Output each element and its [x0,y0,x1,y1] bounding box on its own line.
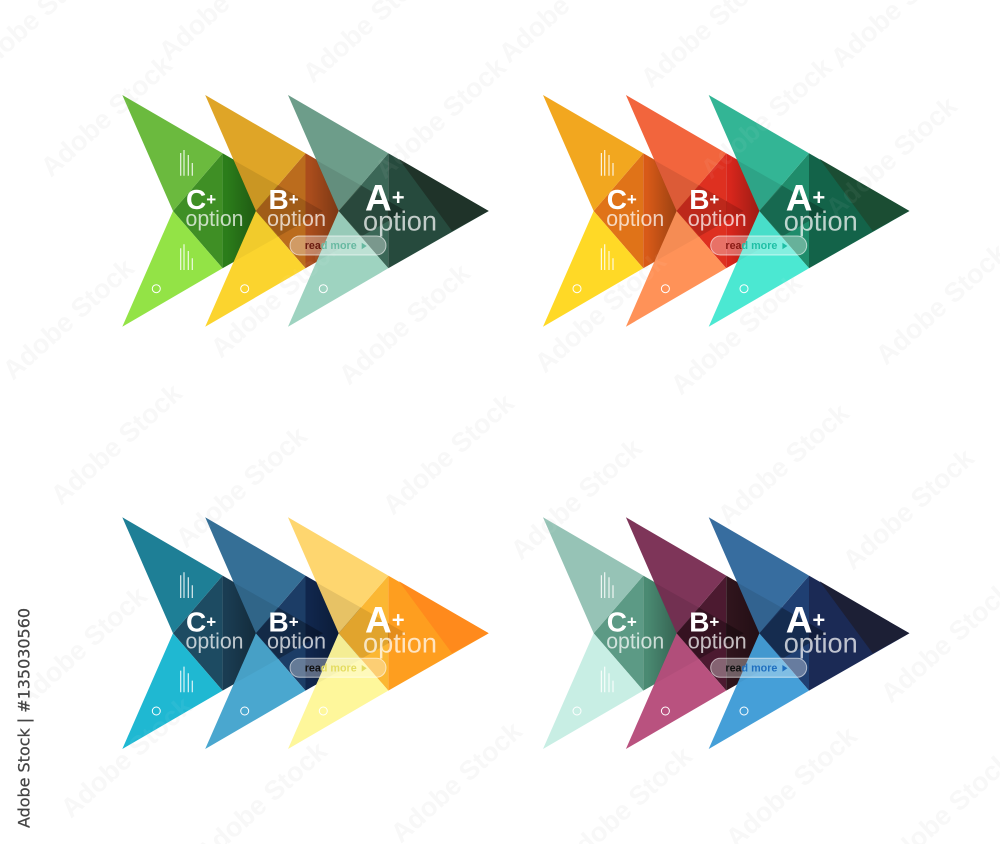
arrow: B option red [626,95,827,327]
arrow: B option plum [626,517,827,749]
arrow: A option navy [709,517,909,749]
arrow: A option teal [709,95,909,327]
arrow: B option blue [205,517,406,749]
icon: bar lines [601,572,613,692]
panel: mint, plum and navy arrow [543,517,909,749]
button text: read more: read more [725,240,777,252]
arrow: A option yellow [288,517,489,749]
panel: teal, blue and yellow arrow [122,517,489,749]
labels: grades, options, rings and button [573,177,858,293]
icon: bar lines [181,150,192,270]
labels: grades, options, rings and button [573,600,858,715]
arrow: A option sage [288,95,489,327]
icon: bar lines [601,150,613,270]
panel: orange, red and teal arrow [543,95,909,327]
panel: green, amber and sage arrow [122,95,489,327]
arrow: C option teal blue [122,517,323,749]
arrow: B option amber [205,95,406,327]
arrow: C option mint [543,517,744,749]
vertical stock credit: Adobe Stock | #135030560 [14,608,34,828]
icon: bar lines [181,572,192,692]
button text: read more: read more [725,662,777,674]
labels: grades, options, rings and button [152,177,437,293]
button text: read more: read more [305,240,357,252]
arrow: C option orange [543,95,744,327]
arrow: C option green [122,95,323,327]
button text: read more: read more [305,662,357,674]
labels: grades, options, rings and button [152,600,437,715]
